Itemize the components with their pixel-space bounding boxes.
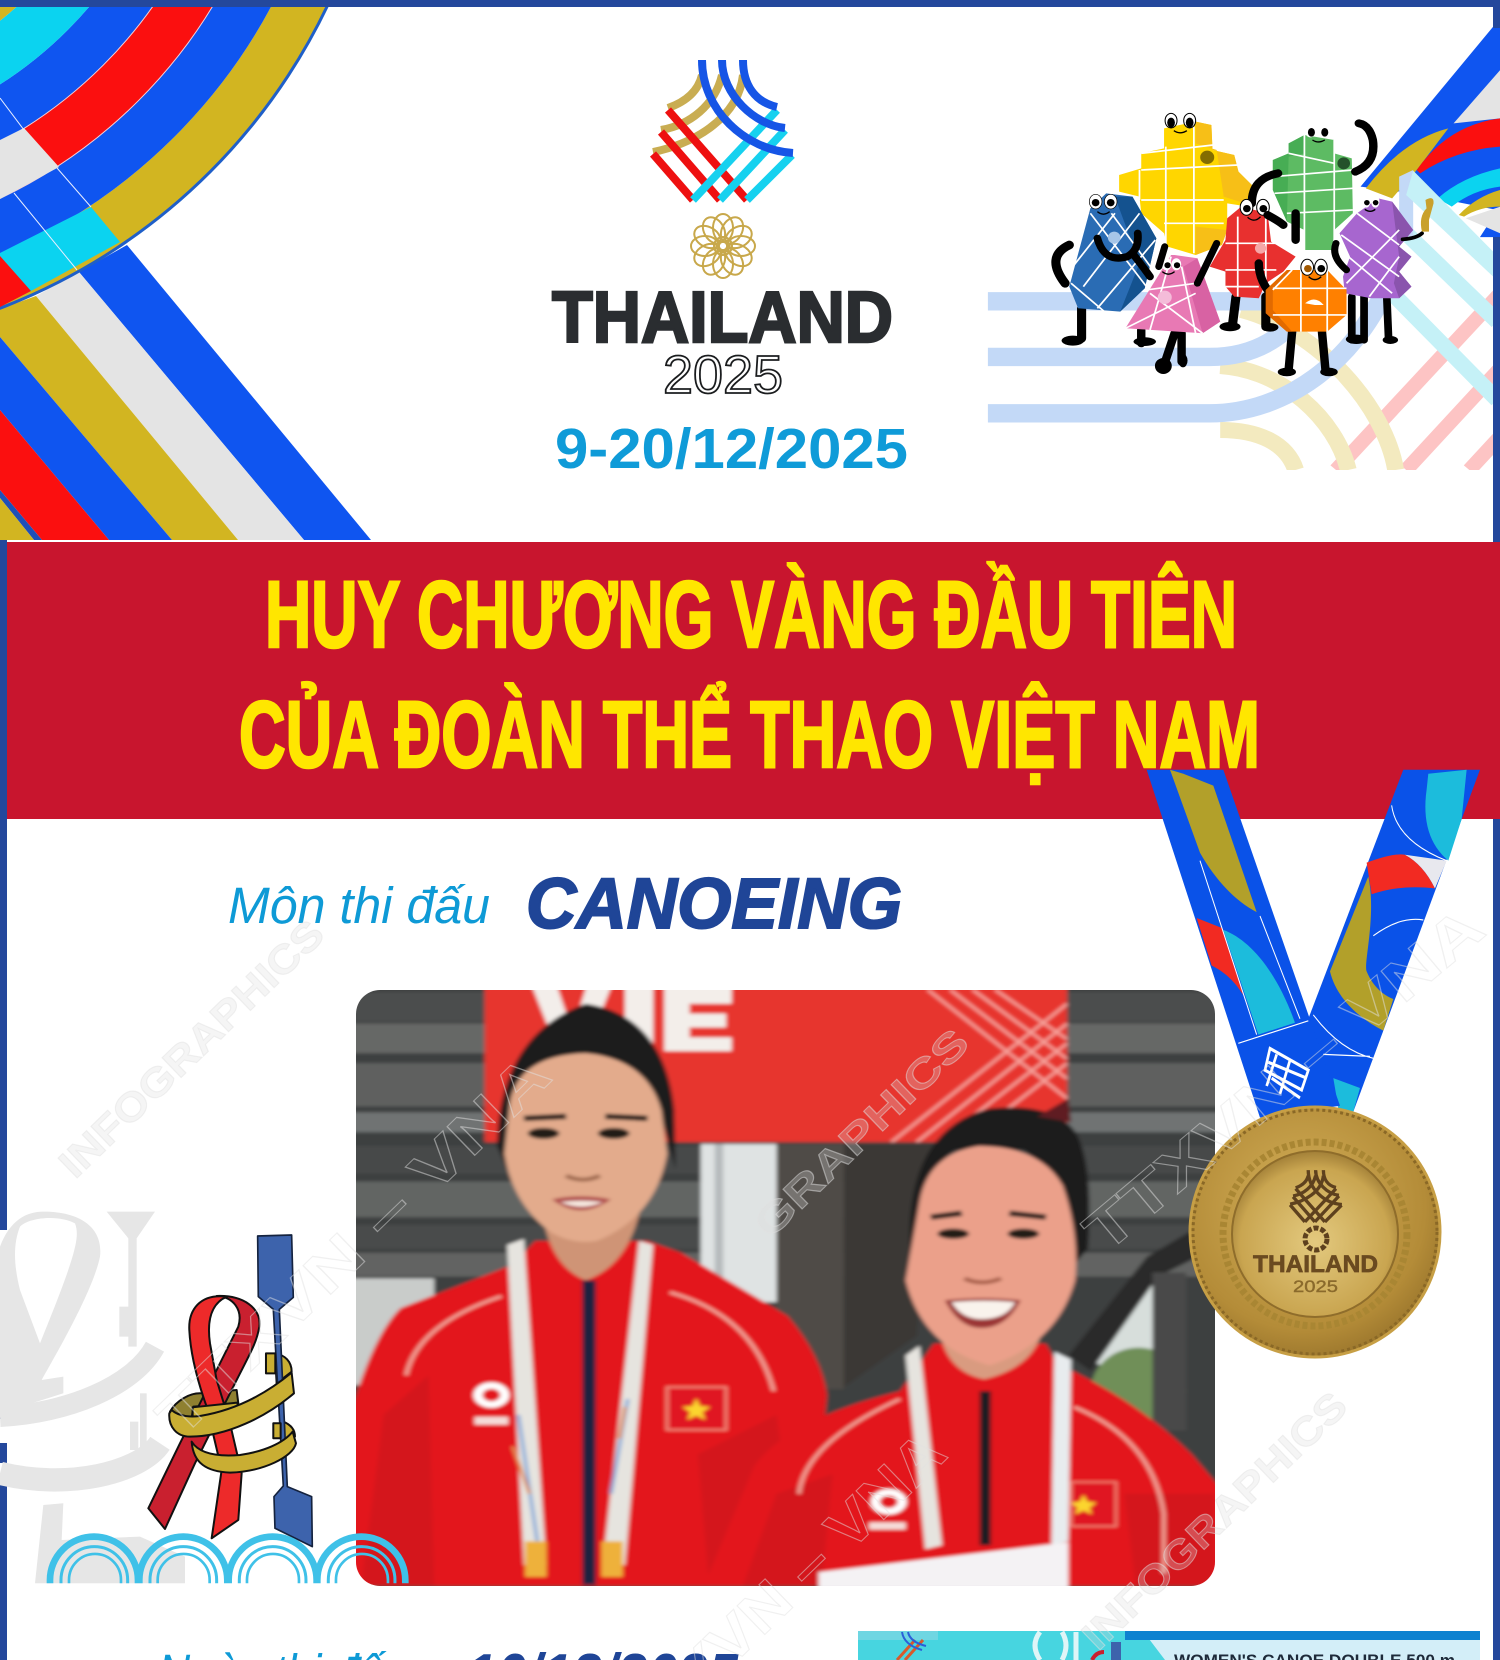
mascot: orange — [1266, 259, 1347, 376]
title banner — [7, 542, 1500, 819]
watermarks: INFOGRAPHICS — [51, 912, 333, 1186]
water waves — [50, 1537, 405, 1583]
watermarks: GRAPHICS — [746, 1020, 978, 1246]
mascot: yellow — [1119, 113, 1254, 255]
mascot: red — [1210, 199, 1296, 332]
mascot: purple — [1335, 196, 1434, 344]
medal disc — [1190, 1107, 1440, 1357]
page frame: left edge — [0, 540, 7, 1660]
medal rosette — [1305, 1228, 1327, 1250]
red team banner — [485, 980, 1067, 1142]
sport label — [228, 865, 902, 944]
decorative grey canoe emblem — [0, 1212, 185, 1583]
emblem: ASEAN rosette — [690, 213, 756, 279]
photo: two Vietnamese athletes — [339, 980, 1237, 1600]
value: CANOEING: CANOEING — [526, 865, 902, 944]
icon: canoeing pictogram with ribbon and paddle — [50, 1235, 405, 1583]
paddle — [258, 1235, 312, 1547]
rings: front parts — [169, 1353, 296, 1473]
watermarks: INFOGRAPHICS — [1074, 1384, 1356, 1658]
mascot: blue — [1056, 193, 1168, 346]
lanyard — [1147, 770, 1480, 1118]
event thumbnail (cropped at the bottom edge) — [858, 1631, 1480, 1660]
emblem: woven roof — [653, 60, 793, 200]
logo: Thailand 2025 SEA Games emblem — [552, 60, 893, 405]
mascot: pink — [1125, 243, 1220, 374]
athlete: right — [704, 1099, 1225, 1589]
rings: back parts — [170, 1353, 295, 1442]
gold medal with lanyard — [1147, 770, 1480, 1357]
athlete: left — [350, 1004, 827, 1586]
medal emblem — [1290, 1170, 1342, 1222]
medal wordmark: THAILAND — [1253, 1251, 1378, 1278]
watermarks: TTXVN – VNA — [1072, 894, 1496, 1265]
wordmark: THAILAND: THAILAND — [552, 278, 893, 358]
mascot: green — [1252, 123, 1373, 250]
mascots group — [1056, 113, 1434, 376]
competition date label (cropped at the bottom edge) — [158, 1642, 739, 1660]
wordmark: 2025: 2025 — [663, 345, 783, 405]
photo background — [339, 980, 1237, 1600]
event dates: 9-20/12/2025 — [555, 417, 908, 481]
decorative woven ribbons: top left — [0, 0, 386, 540]
decorative tracks and ribbon corner: top right — [988, 20, 1500, 470]
medal year: 2025 — [1293, 1277, 1338, 1296]
red ribbon loop — [148, 1296, 260, 1538]
watermarks: TTXVN – VNA — [144, 1041, 563, 1449]
watermarks — [51, 894, 1496, 1660]
label: Môn thi đấu: Môn thi đấu — [228, 877, 490, 934]
